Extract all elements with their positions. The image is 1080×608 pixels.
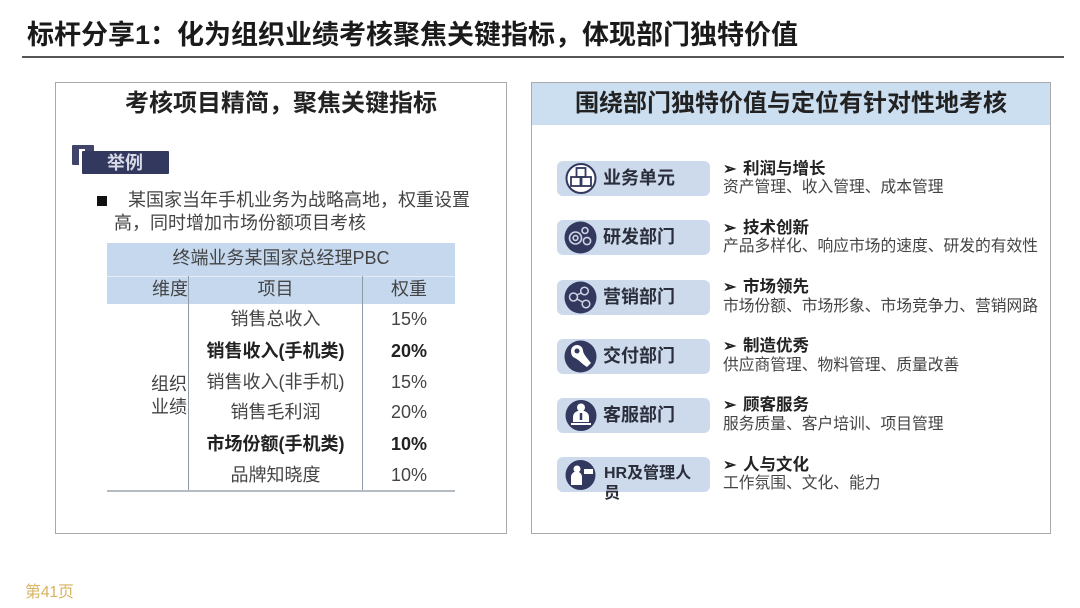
icon: service person [566,400,596,431]
table rows: 20% [391,341,427,361]
bullet text [97,190,470,233]
icon: location hand [564,340,596,372]
details: 服务质量、客户培训、项目管理 [723,416,944,433]
example tag: 举例 [107,153,143,173]
icon: gears [564,222,596,254]
row: 客服部门 [557,398,710,433]
details: 资产管理、收入管理、成本管理 [723,179,944,196]
table rows: 15% [391,309,427,329]
row: 研发部门 [557,220,710,255]
icon: presenter [566,460,596,490]
table rows: 市场份额(手机类) [206,434,344,454]
row: 交付部门 [557,339,710,374]
table header: 终端业务某国家总经理PBC [172,248,390,268]
table rows: 10% [391,465,427,485]
label: 交付部门 [603,346,675,366]
table rows: 20% [391,402,427,422]
page number: 第41页 [25,584,74,601]
table rows: 品牌知晓度 [230,465,320,485]
heading: ➢ [723,338,736,355]
label: HR及管理人员 [604,465,691,502]
table column header: 维度 [152,279,188,299]
table rows: 销售毛利润 [230,402,320,422]
label: 业务单元 [603,168,675,188]
icon: network [564,282,596,314]
row: 业务单元 [557,161,710,196]
table column header: 项目 [258,279,294,299]
row: 营销部门 [557,280,710,315]
heading: 技术创新 [743,219,809,237]
table column header [107,276,455,304]
heading: ➢ [723,220,736,237]
heading: 制造优秀 [743,337,809,355]
label: 营销部门 [603,287,675,307]
icon: boxes [566,163,596,194]
details: 产品多样化、响应市场的速度、研发的有效性 [723,238,1038,255]
right panel heading [532,83,1050,125]
row: HR及管理人员 [557,457,710,492]
panel: right [531,82,1051,534]
table rows: 15% [391,372,427,392]
table [107,243,455,492]
bullet text: 某国家当年手机业务为战略高地，权重设置 [128,190,470,210]
details: 市场份额、市场形象、市场竞争力、营销网路 [723,298,1038,315]
heading: ➢ [723,397,736,414]
row dimension label: 组织业绩 [151,374,187,417]
table column header: 权重 [391,279,427,299]
example tag [72,145,169,174]
table rows: 销售总收入 [230,309,320,329]
heading: 顾客服务 [743,396,809,414]
heading: 人与文化 [743,456,809,474]
heading: 利润与增长 [743,160,826,178]
table rows [206,309,427,485]
panel: left [55,82,507,534]
title: 标杆分享1：化为组织业绩考核聚焦关键指标，体现部门独特价值 [27,20,798,50]
bullet text: 高，同时增加市场份额项目考核 [114,213,366,233]
details: 供应商管理、物料管理、质量改善 [723,357,959,374]
label: 研发部门 [603,227,675,247]
right panel heading: 围绕部门独特价值与定位有针对性地考核 [575,90,1007,117]
table header [107,243,455,276]
heading: ➢ [723,279,736,296]
table rows: 10% [391,434,427,454]
table rows: 销售收入(手机类) [206,341,344,361]
label: 客服部门 [603,405,675,425]
heading: ➢ [723,161,736,178]
left panel heading: 考核项目精简，聚焦关键指标 [125,90,437,117]
details: 工作氛围、文化、能力 [723,475,880,492]
heading: 市场领先 [743,278,809,296]
heading: ➢ [723,457,736,474]
table rows: 销售收入(非手机) [206,372,344,392]
